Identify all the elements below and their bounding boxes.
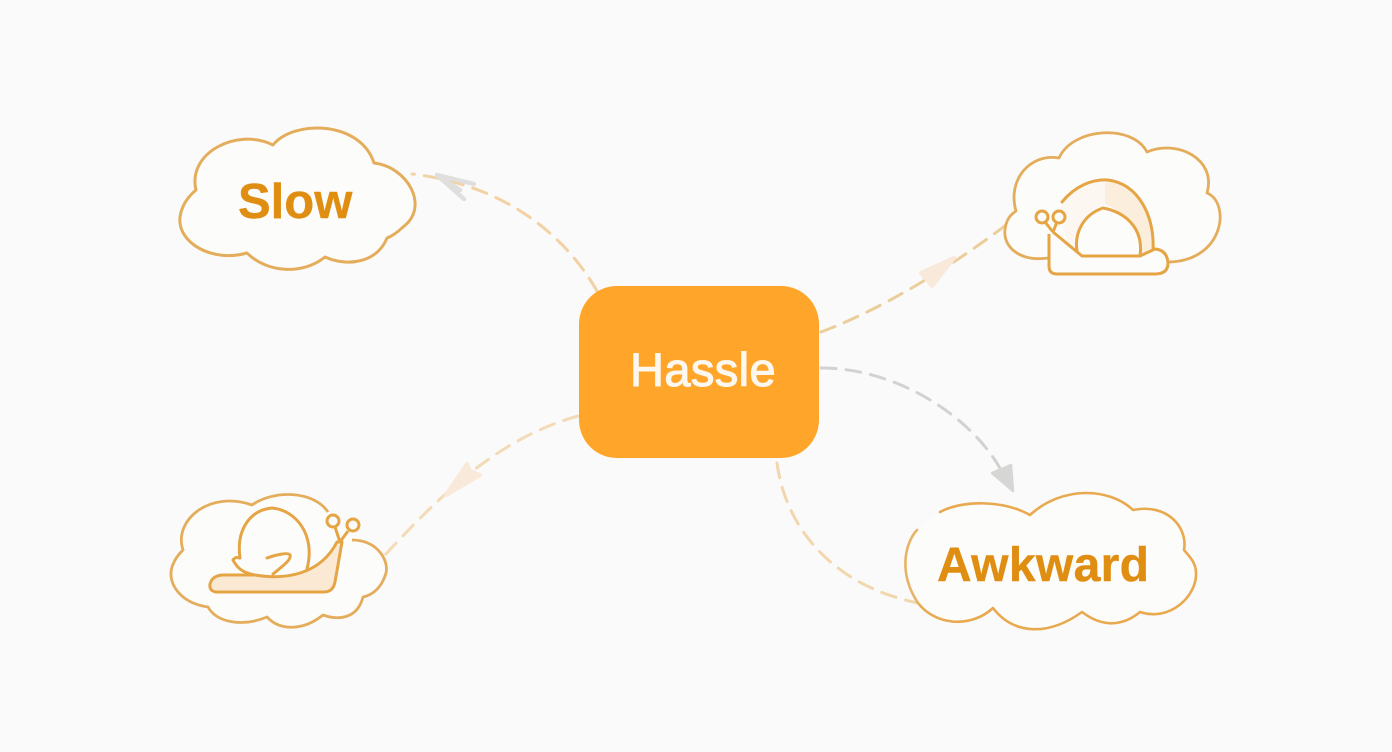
- snail antennae: [1036, 211, 1065, 232]
- arrow: hassle to snail top right: [821, 222, 1010, 332]
- snail body: [210, 542, 342, 592]
- arrow: hassle to snail bottom left: [384, 416, 578, 556]
- cloud fill: [905, 493, 1196, 629]
- cloud: slow: [180, 128, 415, 269]
- snail shell shading: [1105, 180, 1153, 255]
- cloud with snail: top right: [1005, 133, 1220, 274]
- cloud outline: [171, 495, 386, 627]
- cloud: awkward: [905, 493, 1196, 629]
- label: slow: Slow: [238, 175, 353, 229]
- cloud outline: [1005, 133, 1220, 262]
- cloud fill: [171, 495, 386, 627]
- label: hassle: Hassle: [630, 343, 776, 396]
- central box: hassle: [579, 286, 819, 458]
- snail body: [1049, 232, 1168, 274]
- snail shell: [233, 508, 309, 575]
- arrow: hassle to slow: [412, 174, 597, 291]
- arrow: hassle to awkward: [821, 368, 1013, 491]
- snail shell: [1062, 180, 1153, 252]
- arrow: hassle to awkward lower curve: [777, 463, 918, 603]
- cloud outline: [918, 493, 1196, 629]
- label: awkward: Awkward: [937, 539, 1149, 592]
- cloud left arc: [905, 530, 918, 603]
- snail antennae: [327, 515, 359, 542]
- cloud with snail: bottom left: [171, 495, 386, 627]
